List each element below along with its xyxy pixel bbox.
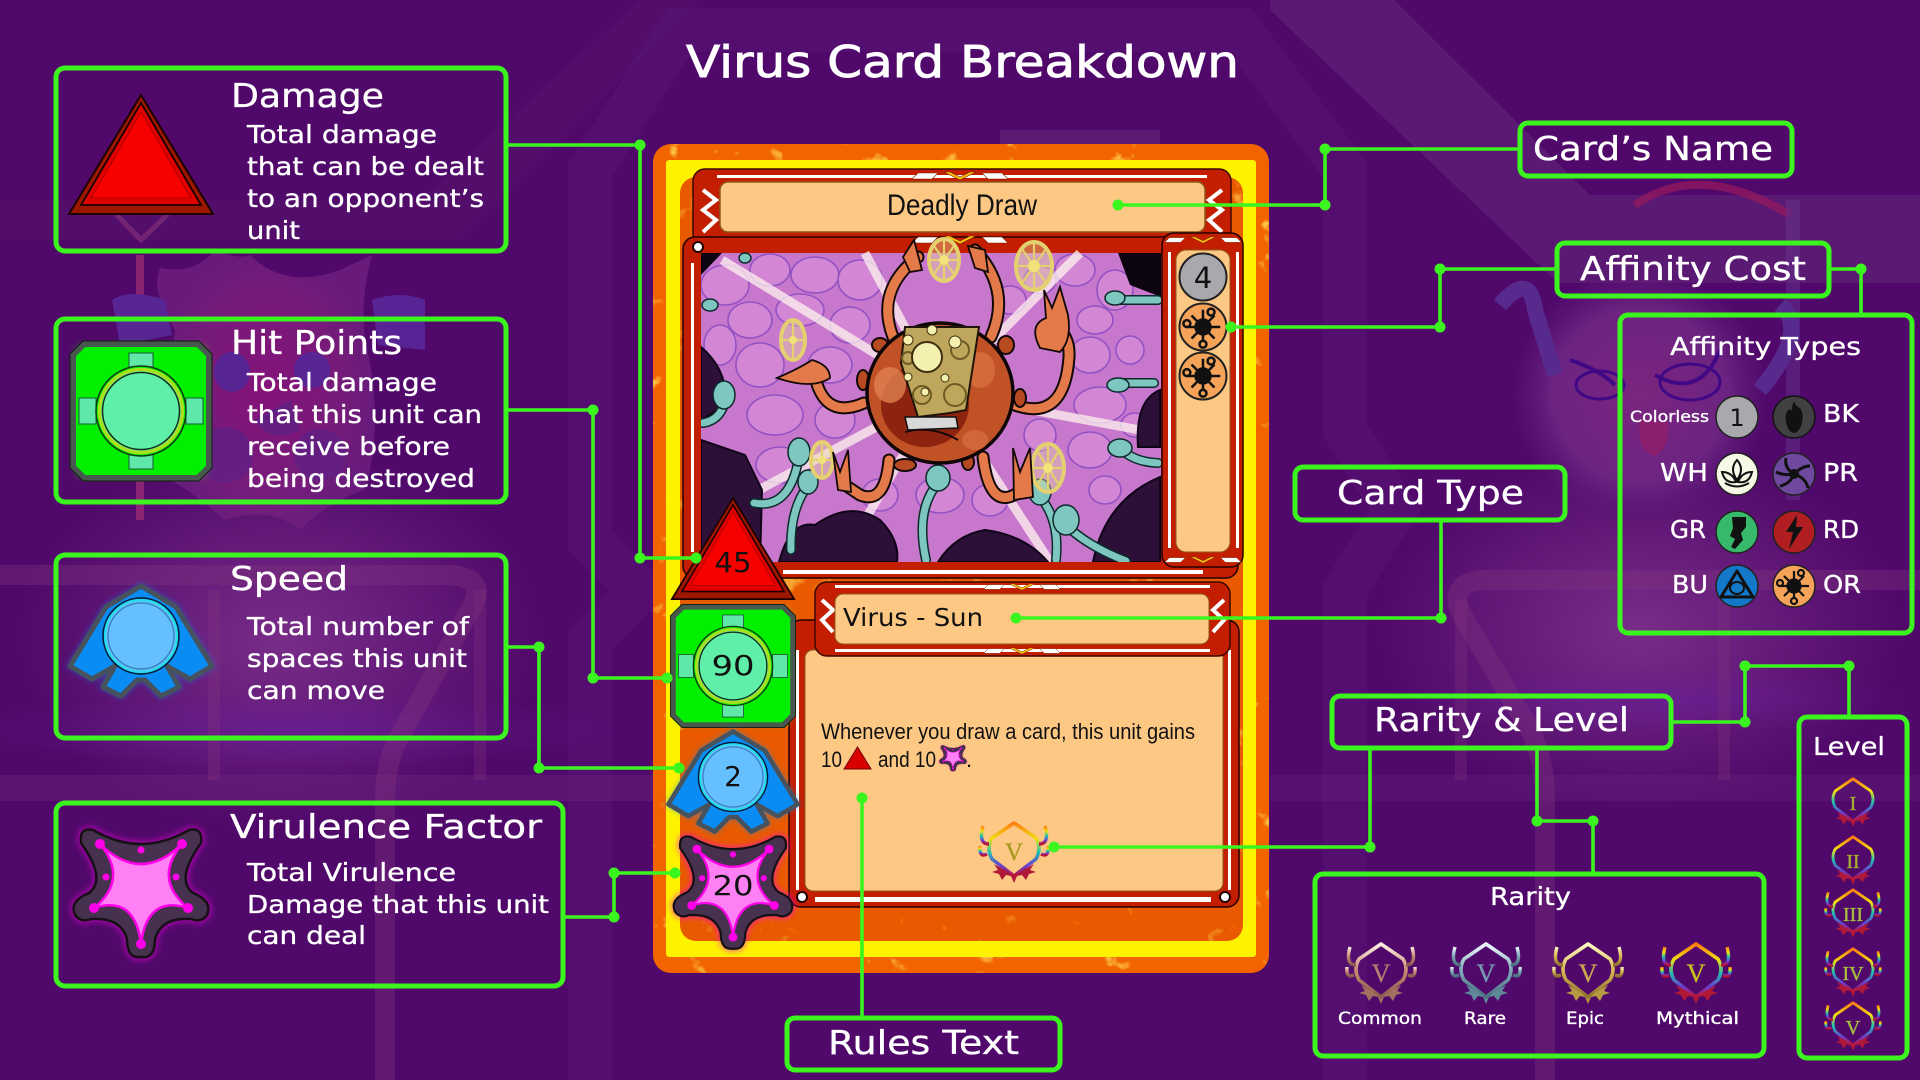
text: virulence description [246, 858, 549, 950]
medal: level I [1833, 779, 1873, 827]
text: damage description [246, 120, 484, 245]
rules text: Whenever you draw a card, this unit gains [821, 719, 1195, 744]
text: hit points description: Total damage [246, 368, 437, 397]
medal: level V [1826, 1003, 1880, 1051]
background: faded right virus [1500, 185, 1800, 520]
text: speed description: Total number of [246, 612, 470, 641]
medal: level III: III [1843, 904, 1863, 926]
medal: level II: II [1846, 851, 1860, 873]
heading: affinity types: Affinity Types [1670, 332, 1861, 361]
text: speed description: can move [247, 676, 385, 705]
rules text box [789, 620, 1239, 907]
stat: hit points 90 [671, 604, 795, 728]
panel: hit points legend [56, 319, 506, 502]
text: damage description: Total damage [246, 120, 437, 149]
icon: damage triangle [69, 95, 213, 214]
teal zombie arms [703, 300, 1158, 561]
golden wheels [781, 239, 1064, 492]
stat: hit points 90: 90 [712, 649, 754, 682]
text: virulence description: Damage that this unit [247, 890, 549, 919]
labels: affinity abbreviations: RD [1823, 515, 1859, 544]
callout: affinity cost: Affinity Cost [1580, 249, 1806, 288]
medal: rare: Rare [1464, 1009, 1506, 1029]
icon: speed badge [70, 586, 212, 696]
callout: rarity and level: Rarity & Level [1374, 700, 1629, 739]
panel: affinity types [1620, 315, 1912, 633]
callout: card type [1295, 467, 1565, 520]
callout: rarity and level [1332, 696, 1671, 748]
virus arms [815, 250, 1069, 498]
callout: rules text: Rules Text [828, 1023, 1019, 1062]
callout: card type: Card Type [1337, 473, 1524, 512]
text: hit points description: that this unit can [247, 400, 482, 429]
icon: colorless: 1 [1729, 404, 1745, 432]
card type label: Virus - Sun [843, 603, 983, 632]
art frame [683, 236, 1238, 578]
callout: card's name: Card’s Name [1533, 129, 1773, 168]
text: damage description: that can be dealt [247, 152, 484, 181]
labels: affinity abbreviations: Colorless [1630, 407, 1709, 426]
text: hit points description: receive before [247, 432, 450, 461]
labels: affinity abbreviations: WH [1660, 458, 1708, 487]
stat: speed 2 [668, 732, 798, 832]
heading: speed: Speed [230, 559, 348, 598]
text: virulence description: Total Virulence [246, 858, 456, 887]
medal: common: V [1372, 959, 1391, 988]
medal: epic: V [1579, 959, 1598, 988]
labels: affinity abbreviations: GR [1670, 515, 1706, 544]
medal: mythical [1656, 944, 1739, 1029]
icon: hit points badge [70, 341, 212, 481]
heading: virulence factor: Virulence Factor [230, 807, 542, 846]
text: damage description: unit [247, 216, 300, 245]
medal: level II [1833, 837, 1873, 885]
icon: virulence star [74, 830, 208, 957]
rules text [821, 719, 1195, 772]
medal: mythical: V [1687, 959, 1706, 988]
heading: damage: Damage [231, 76, 384, 115]
stat: damage 45 [672, 498, 794, 599]
stat: damage 45: 45 [714, 546, 752, 579]
background: faded left virus [112, 214, 425, 530]
corner shadows [701, 253, 1161, 297]
text: hit points description [246, 368, 482, 493]
medal: rare: V [1477, 959, 1496, 988]
card medal: level V mythical: V [1005, 839, 1023, 866]
stat: virulence 20: 20 [712, 869, 754, 902]
text: hit points description: being destroyed [247, 464, 475, 493]
icon: white lotus [1716, 453, 1758, 495]
rules text: and 10 [878, 747, 936, 772]
affinity cost column [1162, 233, 1243, 567]
heading: level: Level [1813, 732, 1885, 761]
card name: Deadly Draw [887, 189, 1037, 222]
icon: red lightning [1773, 511, 1815, 553]
medal: rare [1452, 944, 1520, 1029]
callout: affinity cost [1557, 243, 1829, 296]
labels: affinity abbreviations: BU [1672, 570, 1708, 599]
icon: purple vortex [1773, 453, 1815, 495]
rules text: 10 [821, 747, 842, 772]
text: damage description: to an opponent’s [247, 184, 484, 213]
connector dots [534, 140, 1866, 922]
heading: hit points: Hit Points [231, 323, 402, 362]
purple cell pattern [701, 254, 1149, 516]
medal: level IV: IV [1842, 963, 1864, 985]
card [653, 144, 1269, 973]
labels: affinity abbreviations: OR [1823, 570, 1861, 599]
connector lines [507, 145, 1861, 1017]
dark rocks [701, 347, 1160, 562]
labels: affinity abbreviations [1630, 399, 1861, 599]
card artwork [701, 237, 1161, 562]
orange affinity pip [1180, 352, 1226, 400]
panel: level [1799, 717, 1907, 1058]
stat: virulence 20 [674, 836, 792, 949]
medal: common [1338, 944, 1422, 1029]
colorless cost 4: 4 [1194, 261, 1212, 295]
icon: green fist [1716, 511, 1758, 553]
medal: mythical: Mythical [1656, 1009, 1739, 1029]
panel: virulence factor legend [56, 803, 563, 986]
text: speed description [246, 612, 470, 705]
stat: speed 2: 2 [724, 760, 742, 793]
medal: epic [1554, 944, 1622, 1029]
icon: orange sun [1773, 565, 1815, 607]
medal: level IV [1826, 949, 1880, 997]
title: Virus Card Breakdown [686, 37, 1239, 88]
text: speed description: spaces this unit [247, 644, 467, 673]
callout: rules text [787, 1018, 1060, 1070]
light rays [722, 253, 1140, 562]
orange affinity pip [1180, 304, 1226, 350]
medal: level I: I [1850, 793, 1856, 815]
labels: affinity abbreviations: BK [1823, 399, 1860, 428]
heading: rarity: Rarity [1490, 882, 1571, 911]
medal: common: Common [1338, 1009, 1422, 1029]
medal: level V: V [1846, 1017, 1861, 1039]
icon: colorless [1716, 396, 1758, 438]
virus hands [777, 240, 1069, 500]
panel: rarity [1315, 874, 1764, 1056]
virus body [857, 323, 1026, 471]
text: virulence description: can deal [247, 921, 366, 950]
card border [653, 144, 1269, 973]
icon: blue brain triangle [1716, 565, 1758, 607]
colorless cost 4 [1180, 254, 1226, 300]
golden plate [901, 327, 979, 417]
medal: level III [1826, 890, 1880, 938]
panel: speed legend [56, 555, 506, 738]
rules text: . [966, 747, 972, 772]
panel: damage legend [56, 68, 506, 251]
card name plate [693, 169, 1231, 245]
callout: card's name [1520, 123, 1792, 176]
labels: affinity abbreviations: PR [1823, 458, 1858, 487]
card type plate [815, 582, 1230, 656]
card medal: level V mythical [980, 823, 1048, 883]
medal: epic: Epic [1566, 1009, 1604, 1029]
icon: black skull flame [1773, 396, 1815, 438]
